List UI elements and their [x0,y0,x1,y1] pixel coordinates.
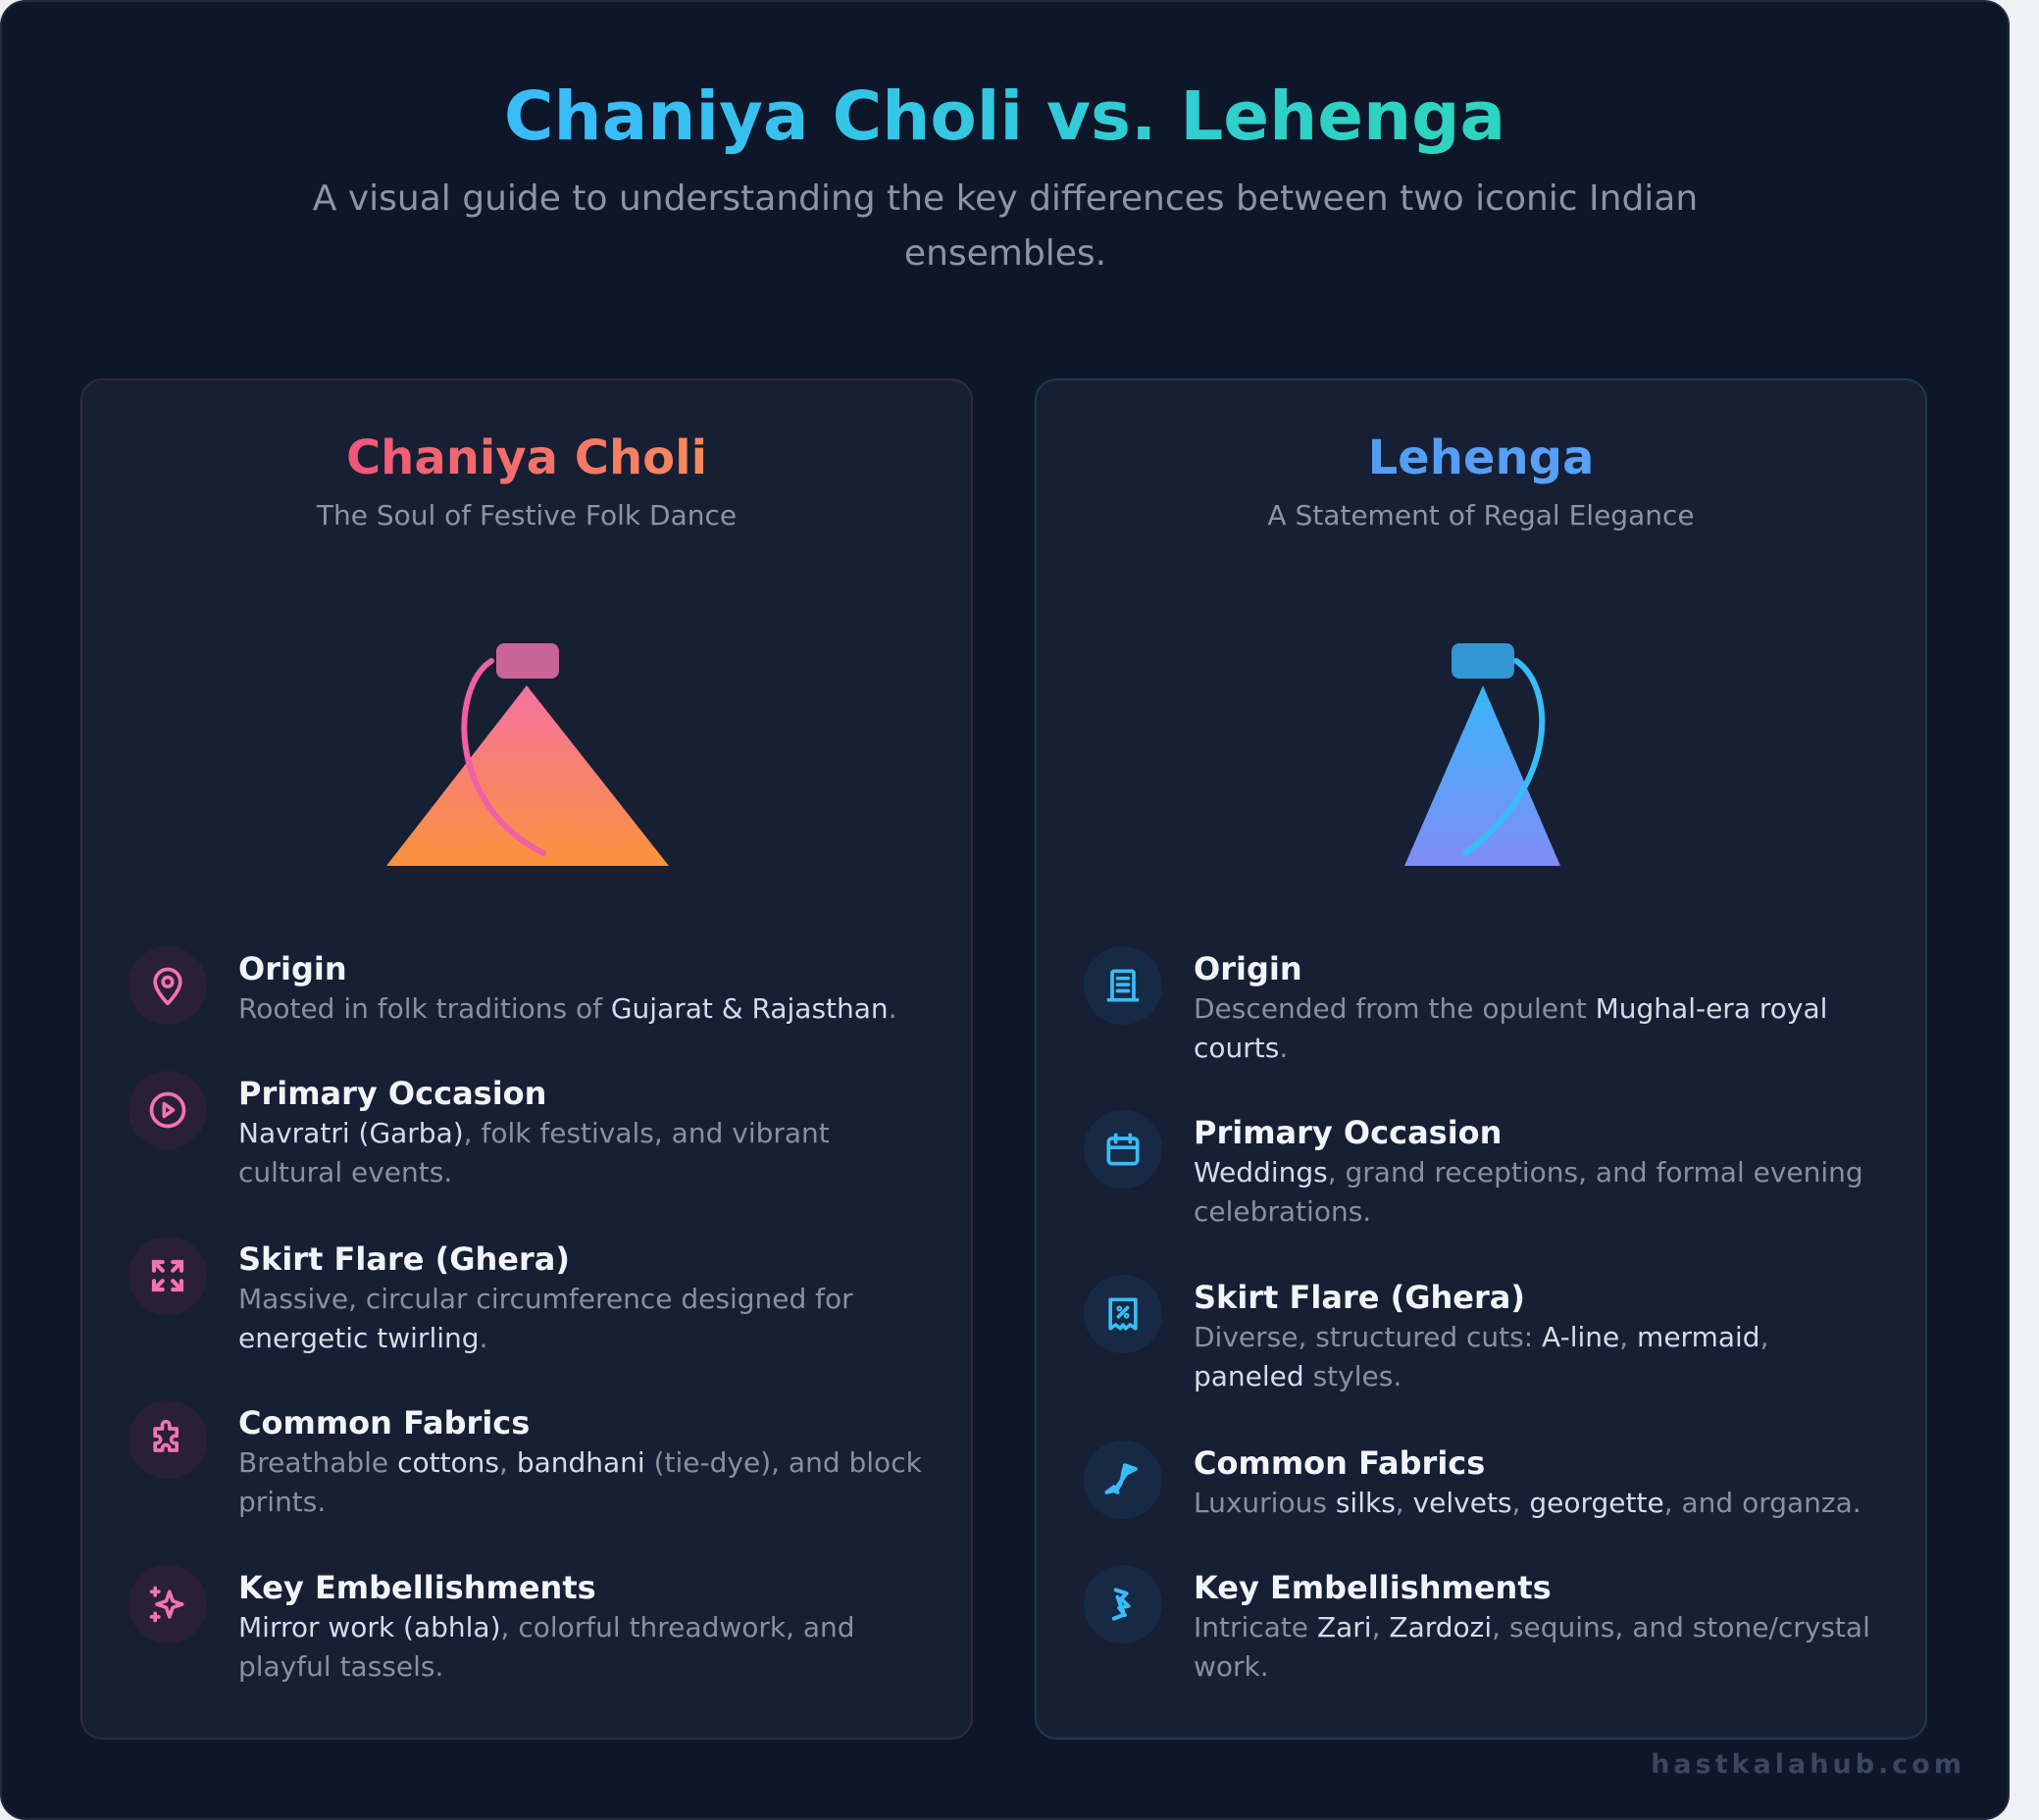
item: origin [128,946,897,1025]
item: key embellishments [128,1565,855,1683]
heading: chaniya choli [80,430,973,486]
item: primary occasion: Navratri (Garba), folk festivals, and vibrant cultural events. [238,1117,830,1188]
panel: chaniya choli [80,379,973,1740]
item: key embellishments: Intricate Zari, Zardozi, sequins, and stone/crystal work. [1194,1611,1870,1683]
item: key embellishments: Mirror work (abhla), colorful threadwork, and playful tassels. [238,1611,855,1683]
item: skirt flare: Skirt Flare (Ghera) [1194,1279,1525,1316]
item: origin [1084,946,1827,1064]
subheading: chaniya choli: The Soul of Festive Folk Dance [317,499,737,531]
item: origin: Descended from the opulent Mughal-era royal courts. [1194,992,1827,1064]
item: skirt flare: Massive, circular circumference designed for energetic twirling. [238,1283,853,1354]
item: common fabrics [128,1400,922,1518]
heading: chaniya choli: Chaniya Choli [346,430,707,485]
item: primary occasion: Weddings, grand receptions, and formal evening celebrations. [1194,1156,1863,1228]
item: skirt flare: Diverse, structured cuts: A-line, mermaid, paneled styles. [1194,1321,1768,1392]
item: origin: Rooted in folk traditions of Gujarat & Rajasthan. [238,992,897,1025]
item: skirt flare: Skirt Flare (Ghera) [238,1240,570,1278]
title: Chaniya Choli vs. Lehenga [504,77,1505,156]
icon: needle [1084,1565,1162,1643]
item: common fabrics: Luxurious silks, velvets, georgette, and organza. [1194,1487,1861,1519]
item: primary occasion [1084,1110,1863,1228]
panel: lehenga [1035,379,1927,1740]
item: origin: Origin [238,950,347,987]
footer: website: hastkalahub.com [1651,1749,1965,1780]
item: primary occasion [128,1071,830,1188]
items: lehenga [1084,946,1870,1683]
item: common fabrics: Breathable cottons, bandhani (tie-dye), and block prints. [238,1446,922,1518]
title [0,73,2010,161]
icon: scroll [1084,946,1162,1025]
heading: lehenga: Lehenga [1368,430,1594,485]
icon: puzzle [128,1400,207,1479]
item: common fabrics: Common Fabrics [1194,1444,1485,1482]
icon: expand arrows [128,1237,207,1315]
item: skirt flare [1084,1275,1768,1392]
item: key embellishments [1084,1565,1870,1683]
heading: lehenga [1035,430,1927,486]
item: common fabrics: Common Fabrics [238,1404,530,1441]
icon: receipt [1084,1275,1162,1353]
item: skirt flare [128,1237,853,1354]
item: key embellishments: Key Embellishments [1194,1569,1552,1606]
icon: calendar [1084,1110,1162,1188]
item: key embellishments: Key Embellishments [238,1569,596,1606]
items: chaniya choli [128,946,922,1683]
subheading: lehenga: A Statement of Regal Elegance [1267,499,1695,531]
subtitle: A visual guide to understanding the key differences between two iconic Indian ensembles. [313,178,1698,274]
icon: sparkles [128,1565,207,1643]
icon: spool [1084,1441,1162,1519]
item: primary occasion: Primary Occasion [1194,1114,1502,1151]
icon: map pin [128,946,207,1025]
item: common fabrics [1084,1441,1861,1519]
item: origin: Origin [1194,950,1302,987]
icon: play circle [128,1071,207,1149]
item: primary occasion: Primary Occasion [238,1075,546,1112]
